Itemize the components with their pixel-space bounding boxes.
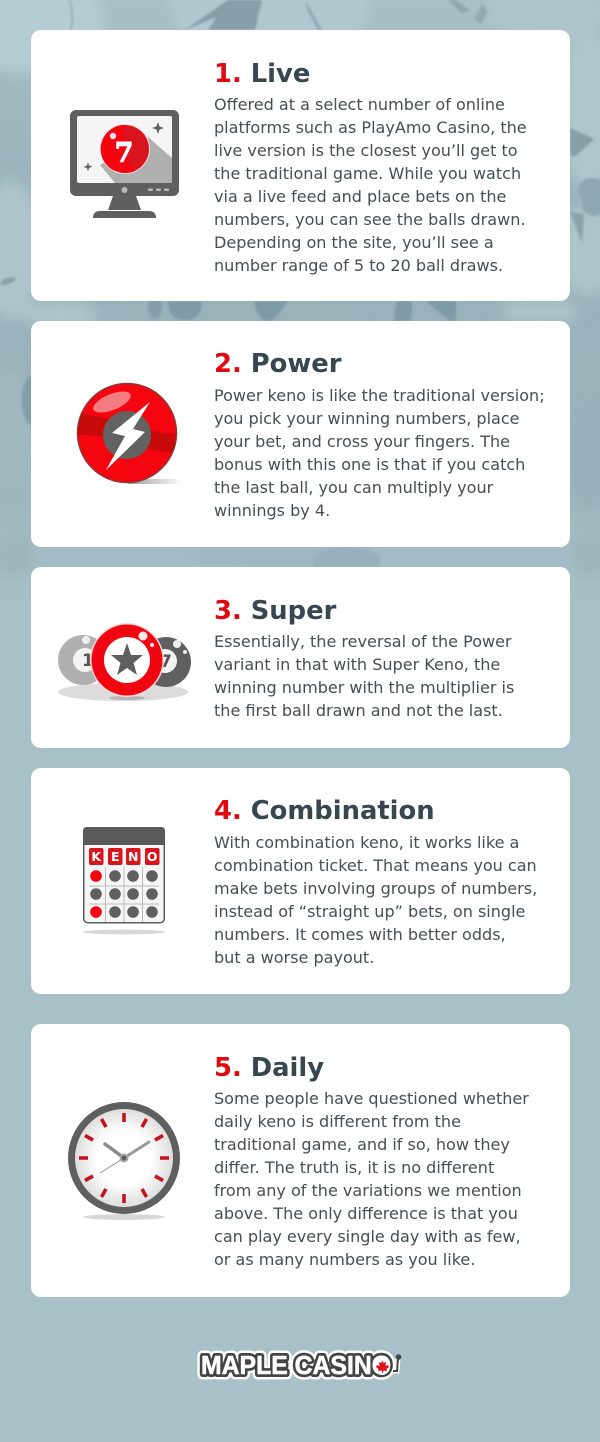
logo: Maple Casino: MAPLE CASINO — [201, 1350, 391, 1380]
icon: three balls with star: 1 — [82, 651, 94, 671]
panel: 1. Live — [31, 30, 570, 301]
text block: live version is the closest you’ll get to — [214, 141, 518, 160]
icon: power ball with lightning — [76, 382, 178, 484]
icon: monitor with lucky 7 ball: 7 — [115, 138, 133, 169]
heading: 3. Super — [214, 596, 336, 626]
heading: 1. Live — [214, 59, 310, 89]
text block: Some people have questioned whether — [214, 1089, 529, 1108]
text block: Offered at a select number of online — [214, 95, 505, 114]
heading: 4. Combination — [214, 796, 435, 826]
text block: combination ticket. That means you can — [214, 856, 537, 875]
text block: or as many numbers as you like. — [214, 1250, 475, 1269]
text block: number range of 5 to 20 ball draws. — [214, 256, 503, 275]
text block: your bet, and cross your fingers. The — [214, 432, 510, 451]
heading: 5. Daily — [214, 1053, 324, 1083]
icon: keno card — [83, 827, 165, 934]
logo: Maple Casino: MAPLE CASINO — [201, 1350, 391, 1380]
text block: from any of the variations we mention — [214, 1181, 522, 1200]
icon: three balls with star — [58, 623, 191, 701]
text block: numbers. It comes with better odds, — [214, 925, 506, 944]
icon: clock — [68, 1102, 180, 1220]
text block: variant in that with Super Keno, the — [214, 655, 500, 674]
icon: monitor with lucky 7 ball — [70, 110, 179, 218]
text block — [214, 386, 545, 520]
panel: 3. Super — [31, 567, 570, 748]
icon: keno card: E — [111, 849, 120, 864]
panel: 2. Power — [31, 321, 570, 547]
text block: but a worse payout. — [214, 948, 374, 967]
text block: daily keno is different from the — [214, 1112, 461, 1131]
text block: platforms such as PlayAmo Casino, the — [214, 118, 527, 137]
panel: 5. Daily — [31, 1024, 570, 1297]
text block: instead of “straight up” bets, on single — [214, 902, 525, 921]
text block: winnings by 4. — [214, 501, 330, 520]
icon: keno card: N — [128, 849, 138, 864]
text block: make bets involving groups of numbers, — [214, 879, 537, 898]
text block: differ. The truth is, it is no different — [214, 1158, 494, 1177]
icon: three balls with star: 7 — [160, 652, 172, 672]
icon: keno card: K — [91, 849, 102, 864]
text block: Essentially, the reversal of the Power — [214, 632, 512, 651]
text block — [214, 833, 537, 967]
text block: above. The only difference is that you — [214, 1204, 518, 1223]
text block: numbers, you can see the balls drawn. — [214, 210, 525, 229]
text block: traditional game, and if so, how they — [214, 1135, 510, 1154]
text block — [214, 632, 514, 720]
text block: via a live feed and place bets on the — [214, 187, 506, 206]
text block: winning number with the multiplier is — [214, 678, 514, 697]
panel: 4. Combination — [31, 768, 570, 994]
text block: the last ball, you can multiply your — [214, 478, 493, 497]
text block: can play every single day with as few, — [214, 1227, 521, 1246]
heading: 2. Power — [214, 349, 341, 379]
text block: the first ball drawn and not the last. — [214, 701, 503, 720]
text block — [214, 95, 527, 275]
text block: Depending on the site, you’ll see a — [214, 233, 494, 252]
text block: With combination keno, it works like a — [214, 833, 519, 852]
text block: you pick your winning numbers, place — [214, 409, 520, 428]
text block: the traditional game. While you watch — [214, 164, 521, 183]
icon: keno card: O — [147, 849, 158, 864]
logo: Maple Casino: MAPLE CASINO — [201, 1350, 391, 1380]
text block: bonus with this one is that if you catch — [214, 455, 525, 474]
text block: Power keno is like the traditional version; — [214, 386, 545, 405]
text block — [214, 1089, 529, 1269]
